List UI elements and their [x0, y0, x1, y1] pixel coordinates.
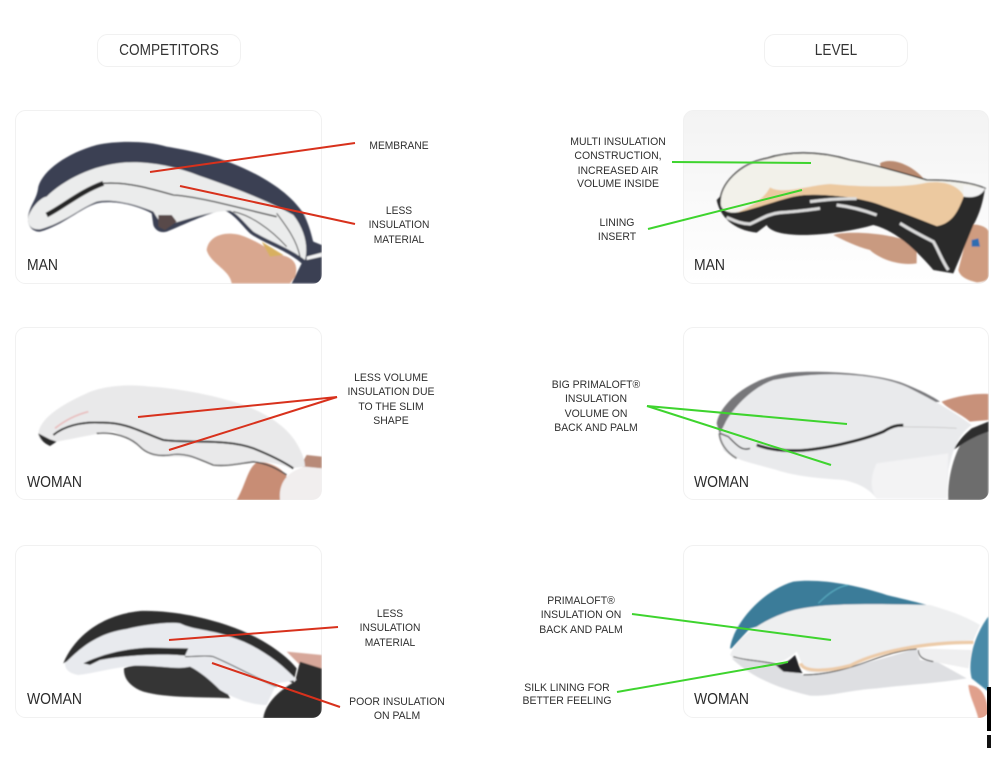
text: primaloft insulation on back and palm: INSULATION ON — [541, 609, 621, 621]
callout lines: level woman 2 — [617, 614, 831, 692]
text: poor insulation on palm: POOR INSULATION — [349, 696, 445, 708]
glove cross-section: competitors man — [28, 142, 322, 283]
text: big primaloft insulation — [552, 379, 640, 434]
label: woman: WOMAN — [27, 474, 82, 491]
panel: competitors woman 2 — [16, 546, 322, 718]
text: silk lining: BETTER FEELING — [523, 695, 611, 707]
text: less insulation material 2: INSULATION — [360, 622, 420, 634]
panel: competitors woman 1 — [16, 328, 322, 500]
text: less insulation material 2: MATERIAL — [365, 637, 415, 649]
text: multi insulation construction: MULTI INSULATION — [570, 136, 666, 148]
glove cross-section: competitors woman 1 — [38, 385, 322, 500]
text: primaloft insulation on back and palm — [539, 595, 623, 636]
text: less insulation material 2: LESS — [377, 608, 403, 620]
glove cross-section: level man — [717, 153, 988, 282]
glove cross-section: level woman 1 — [717, 372, 988, 500]
heading: competitors — [98, 34, 240, 66]
callout lines: competitors man — [150, 143, 355, 224]
text: multi insulation construction: VOLUME INSIDE — [577, 178, 659, 190]
panel: level woman 2 — [684, 546, 988, 718]
text: less volume insulation: TO THE SLIM — [358, 401, 424, 413]
text: primaloft insulation on back and palm: PRIMALOFT® — [547, 595, 615, 607]
text: silk lining — [523, 682, 611, 707]
text: silk lining: SILK LINING FOR — [524, 682, 610, 694]
panel: level man — [684, 110, 988, 284]
glove cross-section: level woman 2 — [730, 581, 988, 718]
text: less insulation material — [369, 205, 429, 246]
heading: level: LEVEL — [815, 42, 857, 59]
text: less insulation material: MATERIAL — [374, 234, 424, 246]
callout lines: level man — [648, 162, 811, 229]
text: less insulation material: LESS — [386, 205, 412, 217]
callout lines: competitors woman 1 — [138, 397, 337, 450]
black corner marks — [987, 687, 991, 748]
text: membrane: MEMBRANE — [369, 140, 429, 152]
label: woman: WOMAN — [694, 474, 749, 491]
label: man: MAN — [694, 257, 725, 274]
text: less insulation material 2 — [360, 608, 420, 649]
text: less volume insulation — [347, 372, 435, 427]
text: big primaloft insulation: BACK AND PALM — [554, 422, 638, 434]
callout lines: competitors woman 2 — [169, 627, 340, 707]
text: big primaloft insulation: INSULATION — [565, 393, 627, 405]
text: big primaloft insulation: BIG PRIMALOFT® — [552, 379, 640, 391]
text: multi insulation construction — [570, 136, 666, 190]
glove cross-section: competitors woman 2 — [63, 611, 322, 718]
text: poor insulation on palm — [349, 696, 445, 722]
text: lining insert: INSERT — [598, 231, 637, 243]
label: woman: WOMAN — [27, 691, 82, 708]
text: lining insert — [598, 217, 637, 243]
heading: competitors: COMPETITORS — [119, 42, 219, 59]
text: lining insert: LINING — [600, 217, 634, 229]
text: less volume insulation: SHAPE — [373, 415, 409, 427]
text: less insulation material: INSULATION — [369, 219, 429, 231]
text: primaloft insulation on back and palm: BACK AND PALM — [539, 624, 623, 636]
panel: level woman 1 — [684, 328, 988, 500]
text: multi insulation construction: INCREASED AIR — [578, 165, 659, 177]
callout lines: level woman 1 — [647, 406, 847, 465]
text: less volume insulation: LESS VOLUME — [354, 372, 428, 384]
text: multi insulation construction: CONSTRUCTION, — [574, 150, 662, 162]
label: man: MAN — [27, 257, 58, 274]
text: poor insulation on palm: ON PALM — [374, 710, 420, 722]
label: woman: WOMAN — [694, 691, 749, 708]
heading: level — [764, 34, 908, 66]
text: big primaloft insulation: VOLUME ON — [565, 408, 627, 420]
text: less volume insulation: INSULATION DUE — [347, 386, 435, 398]
panel: competitors man — [16, 110, 322, 284]
